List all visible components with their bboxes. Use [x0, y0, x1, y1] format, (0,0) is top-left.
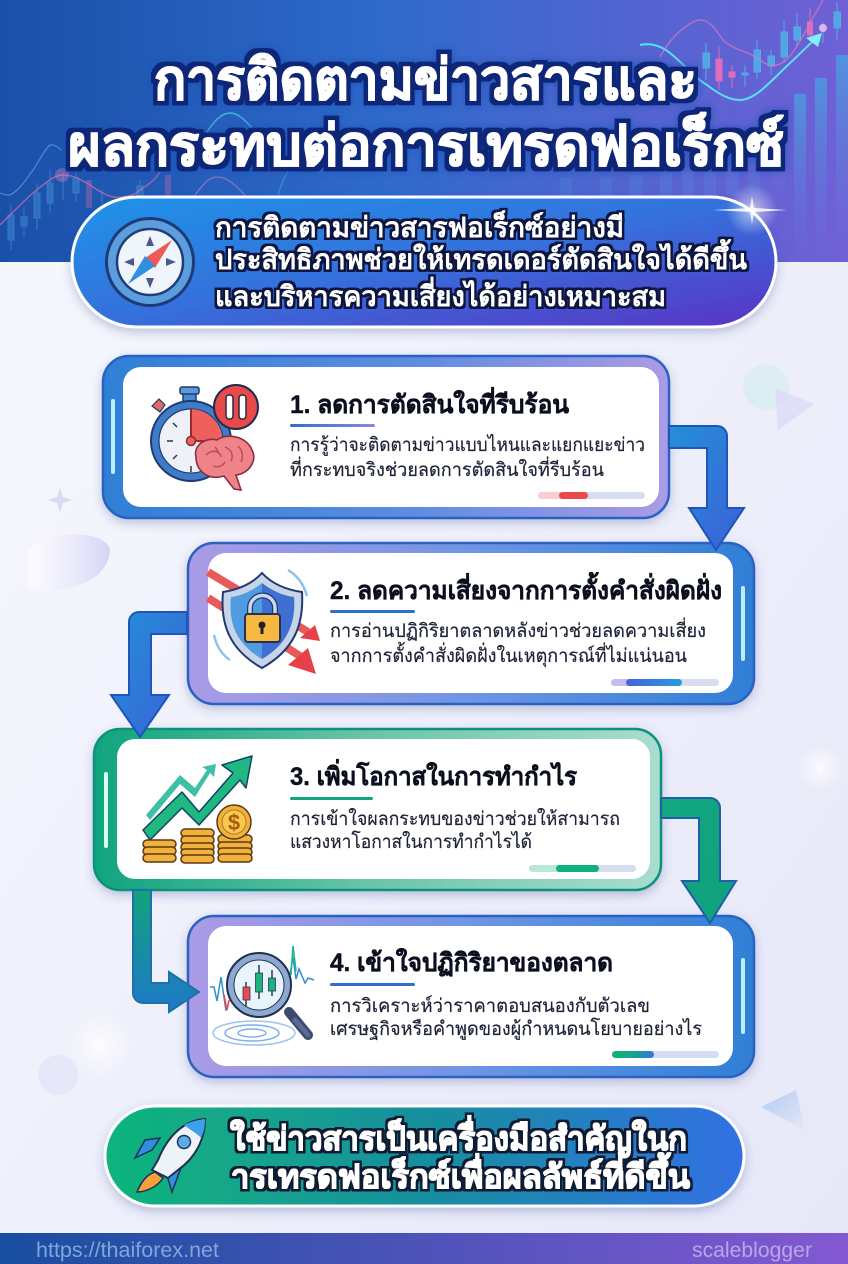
- arrow: step 3 down to step 4 left: [133, 890, 199, 1012]
- footer: scaleblogger: [692, 1239, 812, 1262]
- progress bar: [538, 492, 645, 499]
- trend line right: [640, 38, 817, 100]
- closing text: [230, 1115, 690, 1195]
- panel: step 3: [94, 729, 661, 890]
- arrow: step 1 to step 2: [669, 426, 744, 550]
- footer: https://thaiforex.net: [36, 1239, 219, 1262]
- icon: growth arrows and coins: $: [228, 810, 240, 835]
- title: [68, 48, 784, 177]
- icon: rocket: [135, 1119, 205, 1192]
- step 3 text: [290, 759, 620, 853]
- footer: [0, 1233, 848, 1264]
- step 4 text: การวิเคราะห์ว่าราคาตอบสนองกับตัวเลข: [330, 995, 650, 1017]
- progress bar: [611, 679, 719, 686]
- icon: compass: [105, 217, 195, 307]
- icon: magnifier over candlesticks: [210, 946, 314, 1045]
- closing text: ใช้ข่าวสารเป็นเครื่องมือสำคัญในก: [230, 1115, 687, 1158]
- decorative pale shapes: [28, 364, 844, 1130]
- title: การติดตามข่าวสารและ: [154, 48, 697, 111]
- header band with chart backdrop: [0, 0, 848, 262]
- sparkle star: [713, 184, 787, 236]
- progress bar: [612, 1051, 719, 1058]
- progress bar: [529, 865, 636, 872]
- step 1 text: [290, 387, 645, 481]
- panel: closing call to action: [105, 1106, 744, 1206]
- step 1 text: การรู้ว่าจะติดตามข่าวแบบไหนและแยกแยะข่าว: [290, 434, 645, 456]
- left chart: [8, 170, 143, 250]
- step 3 text: 3. เพิ่มโอกาสในการทำกำไร: [290, 759, 578, 791]
- panel: step 2: [188, 543, 754, 704]
- icon: growth arrows and coins: [143, 756, 252, 863]
- step 3 text: แสวงหาโอกาสในการทำกำไรได้: [290, 830, 532, 853]
- arrow: step 2 to step 3: [111, 612, 187, 737]
- candles right: [703, 2, 840, 87]
- step 2 text: จากการตั้งคำสั่งผิดฝั่งในเหตุการณ์ที่ไม่แน่นอน: [330, 642, 687, 668]
- panel: intro summary: [72, 197, 776, 327]
- closing text: ารเทรดฟอเร็กซ์เพื่อผลลัพธ์ที่ดีขึ้น: [231, 1152, 690, 1195]
- step 2 text: 2. ลดความเสี่ยงจากการตั้งคำสั่งผิดฝั่ง: [330, 571, 722, 605]
- step 2 text: การอ่านปฏิกิริยาตลาดหลังข่าวช่วยลดความเสี่ยง: [330, 617, 706, 642]
- step 3 text: การเข้าใจผลกระทบของข่าวช่วยให้สามารถ: [290, 808, 620, 830]
- step 1 text: ที่กระทบจริงช่วยลดการตัดสินใจที่รีบร้อน: [290, 456, 604, 481]
- intro text: ประสิทธิภาพช่วยให้เทรดเดอร์ตัดสินใจได้ดีขึ้น: [215, 238, 747, 275]
- intro text: [215, 210, 747, 312]
- arrow: step 3 to step 4 right: [661, 798, 736, 923]
- step 2 text: [330, 571, 722, 668]
- step 4 text: เศรษฐกิจหรือคำพูดของผู้กำหนดนโยบายอย่างไร: [330, 1017, 702, 1040]
- step 4 text: 4. เข้าใจปฏิกิริยาของตลาด: [330, 947, 613, 977]
- intro text: การติดตามข่าวสารฟอเร็กซ์อย่างมี: [215, 210, 624, 243]
- intro text: และบริหารความเสี่ยงได้อย่างเหมาะสม: [215, 276, 666, 312]
- panel: step 4: [188, 916, 754, 1077]
- step 1 text: 1. ลดการตัดสินใจที่รีบร้อน: [290, 387, 569, 419]
- icon: stopwatch and brain: [151, 385, 258, 490]
- panel: step 1: [103, 356, 669, 518]
- title: ผลกระทบต่อการเทรดฟอเร็กซ์: [68, 111, 784, 177]
- icon: shield with padlock and falling arrows: [208, 570, 320, 674]
- step 4 text: [330, 947, 702, 1040]
